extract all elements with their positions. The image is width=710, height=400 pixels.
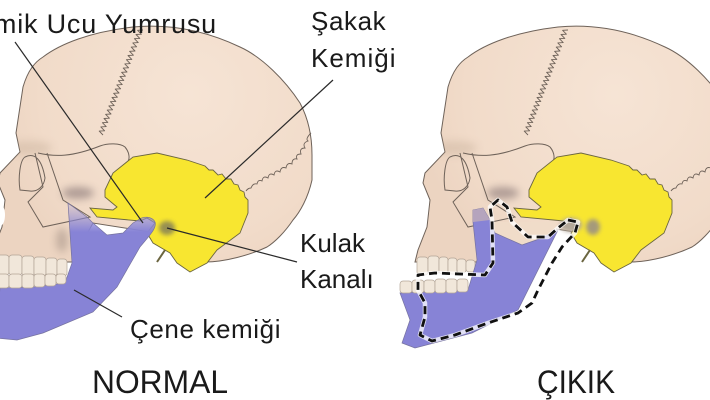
lower teeth bbox=[0, 274, 66, 288]
temporal bone bbox=[514, 153, 672, 272]
panel: dislocated skull bbox=[400, 26, 710, 348]
bone behind jaw notch bbox=[488, 222, 556, 246]
leader line: condyle bbox=[15, 42, 143, 223]
heading: dislocated: ÇIKIK bbox=[537, 364, 615, 400]
label: ear canal: Kanalı bbox=[300, 264, 374, 294]
label: temporal bone: Şakak bbox=[311, 6, 386, 36]
upper teeth bbox=[0, 255, 67, 276]
lower teeth bbox=[400, 279, 468, 293]
empty joint socket bbox=[560, 218, 582, 232]
cranium and face bones bbox=[415, 26, 710, 262]
lower jaw bone bbox=[0, 203, 155, 340]
temporal bone bbox=[90, 153, 248, 272]
ear canal bbox=[586, 219, 600, 235]
styloid process bbox=[582, 250, 590, 262]
upper teeth bbox=[417, 256, 475, 275]
dashed normal jaw position bbox=[418, 200, 578, 341]
label: temporal bone: Kemiği bbox=[311, 43, 396, 73]
cranium and face bones bbox=[0, 26, 312, 262]
label: ear canal: Kulak bbox=[300, 228, 365, 258]
styloid process bbox=[157, 250, 165, 262]
nasal opening bbox=[0, 204, 5, 226]
leader line: ear canal bbox=[167, 228, 297, 262]
leader line: jaw bone bbox=[74, 290, 122, 317]
protruded jaw bone bbox=[400, 208, 558, 348]
ear canal bbox=[159, 221, 175, 235]
leader line: temporal bone bbox=[205, 80, 333, 198]
heading: normal: NORMAL bbox=[92, 364, 228, 400]
label: jaw bone: Çene kemiği bbox=[130, 314, 281, 344]
panel: normal skull bbox=[0, 26, 312, 340]
coronoid tip bbox=[473, 208, 490, 222]
